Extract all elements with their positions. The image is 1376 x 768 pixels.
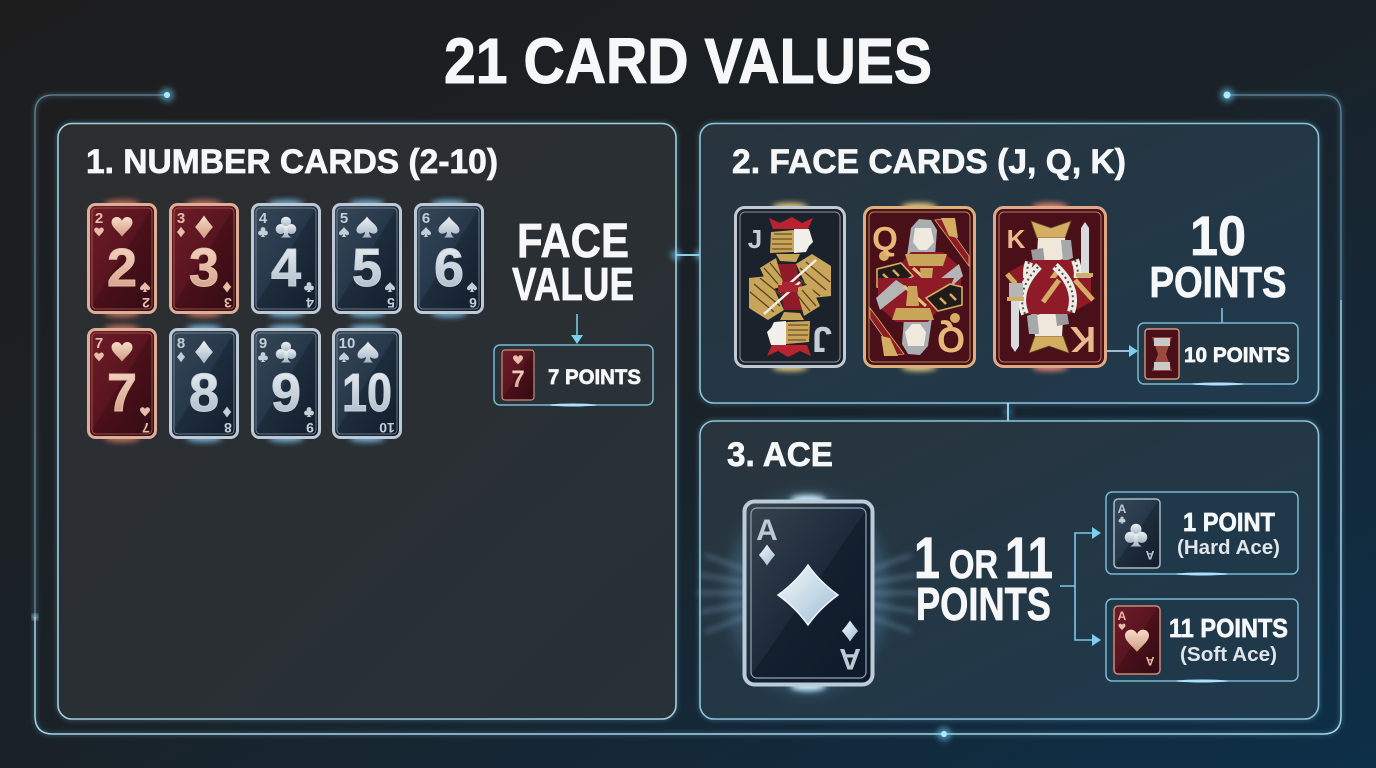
card 10 of spades: 10 (379, 420, 395, 436)
queen card: Q (937, 319, 965, 360)
label: face value: FACE (517, 215, 629, 268)
heading: ace: 3. ACE (727, 436, 833, 474)
jack card: J (812, 319, 832, 360)
card 3 of diamonds: 3 (224, 295, 232, 311)
card 2 of hearts: 2 (142, 295, 150, 311)
mini ace of clubs (1114, 499, 1160, 568)
card 7 of hearts: 7 (142, 420, 150, 436)
king card: K (1070, 319, 1096, 360)
mini ace of hearts: A (1118, 609, 1127, 623)
queen card: Q (872, 220, 898, 257)
card 8 of diamonds: 8 (189, 363, 219, 423)
card 7 of hearts: 7 (95, 335, 103, 352)
queen card (864, 203, 974, 371)
card 5 of spades (334, 200, 400, 317)
label: 1 or 11 points: 11 (1005, 526, 1053, 591)
card 3 of diamonds (170, 200, 238, 317)
connector: label to example (1221, 308, 1223, 323)
card 9 of clubs: 9 (271, 363, 301, 423)
card 4 of clubs: 4 (259, 210, 268, 227)
card 3 of diamonds: 3 (189, 238, 219, 298)
text: 1 point hard ace: 1 POINT (1183, 507, 1275, 537)
label: face value: VALUE (512, 258, 634, 310)
mini ace of hearts: A (1145, 654, 1154, 668)
card 9 of clubs: 9 (259, 335, 267, 352)
card 3 of diamonds: 3 (177, 210, 185, 227)
label: 10 points: 10 (1190, 204, 1246, 267)
label: 1 or 11 points: OR (949, 543, 998, 587)
heading: face cards: 2. FACE CARDS (J, Q, K) (732, 143, 1126, 181)
card 5 of spades: 5 (340, 210, 348, 227)
mini ace of clubs: A (1145, 548, 1154, 562)
text: 1 point hard ace (1177, 507, 1280, 559)
mini card 7: 7 (511, 366, 525, 393)
label: 1 or 11 points (914, 526, 1053, 630)
heading: number cards: 1. NUMBER CARDS (2-10) (86, 143, 498, 181)
card 6 of spades: 6 (469, 295, 477, 311)
card 8 of diamonds (170, 325, 238, 442)
panel: face cards (700, 124, 1318, 403)
ace of diamonds card: A (839, 642, 861, 675)
label: 10 points: POINTS (1150, 258, 1286, 307)
card 6 of spades (416, 200, 482, 317)
jack card: J (748, 224, 762, 254)
ace of diamonds card: A (756, 514, 778, 547)
title: 21 CARD VALUES (444, 25, 932, 97)
panel: ace (697, 421, 1318, 719)
card 7 of hearts (88, 325, 156, 442)
mini king card (1145, 329, 1179, 379)
connector between panels 1 and 2 (671, 250, 705, 260)
card 6 of spades: 6 (422, 210, 430, 227)
card 10 of spades: 10 (342, 363, 392, 423)
text: 10 points: 10 POINTS (1184, 344, 1290, 367)
text: 11 points soft ace (1169, 613, 1288, 666)
card 4 of clubs (252, 200, 320, 317)
arrow: face value to example (571, 314, 583, 344)
card 2 of hearts: 2 (95, 210, 103, 227)
arrow: king to example (1107, 345, 1138, 357)
label: 1 or 11 points: POINTS (916, 578, 1051, 630)
text: 7 points: 7 POINTS (548, 366, 641, 389)
card 5 of spades: 5 (387, 295, 395, 311)
panel: number cards (58, 124, 676, 719)
card 5 of spades: 5 (352, 238, 382, 298)
mini ace of clubs: A (1118, 502, 1127, 516)
card 10 of spades: 10 (339, 335, 355, 352)
jack card (736, 203, 844, 371)
card 4 of clubs: 4 (271, 238, 301, 298)
card 8 of diamonds: 8 (177, 335, 185, 352)
card 6 of spades: 6 (434, 238, 464, 298)
mini ace of hearts (1114, 606, 1160, 674)
card 2 of hearts: 2 (107, 238, 137, 298)
card 8 of diamonds: 8 (224, 420, 232, 436)
mini card 7 (502, 350, 534, 400)
callout: hard ace (1106, 492, 1298, 576)
card 10 of spades (334, 325, 400, 442)
callout: 10 points (1138, 323, 1298, 386)
label: face value (512, 215, 634, 310)
arrow: branching to hard and soft ace (1060, 527, 1101, 646)
card 4 of clubs: 4 (306, 295, 314, 311)
king card: K (1007, 224, 1026, 254)
card 9 of clubs: 9 (306, 420, 314, 436)
card 9 of clubs (252, 325, 320, 442)
king card (994, 203, 1106, 371)
callout: soft ace (1106, 599, 1298, 682)
callout: 7 points (494, 345, 653, 406)
connector between panels 2 and 3 (1003, 403, 1013, 421)
text: 11 points soft ace: 11 POINTS (1169, 613, 1288, 643)
text: 1 point hard ace: (Hard Ace) (1177, 537, 1280, 559)
card 7 of hearts: 7 (107, 363, 137, 423)
card 2 of hearts (88, 200, 156, 317)
text: 11 points soft ace: (Soft Ace) (1180, 644, 1277, 666)
label: 10 points (1150, 204, 1286, 307)
ace of diamonds card (697, 493, 919, 693)
label: 1 or 11 points: 1 (914, 526, 940, 591)
